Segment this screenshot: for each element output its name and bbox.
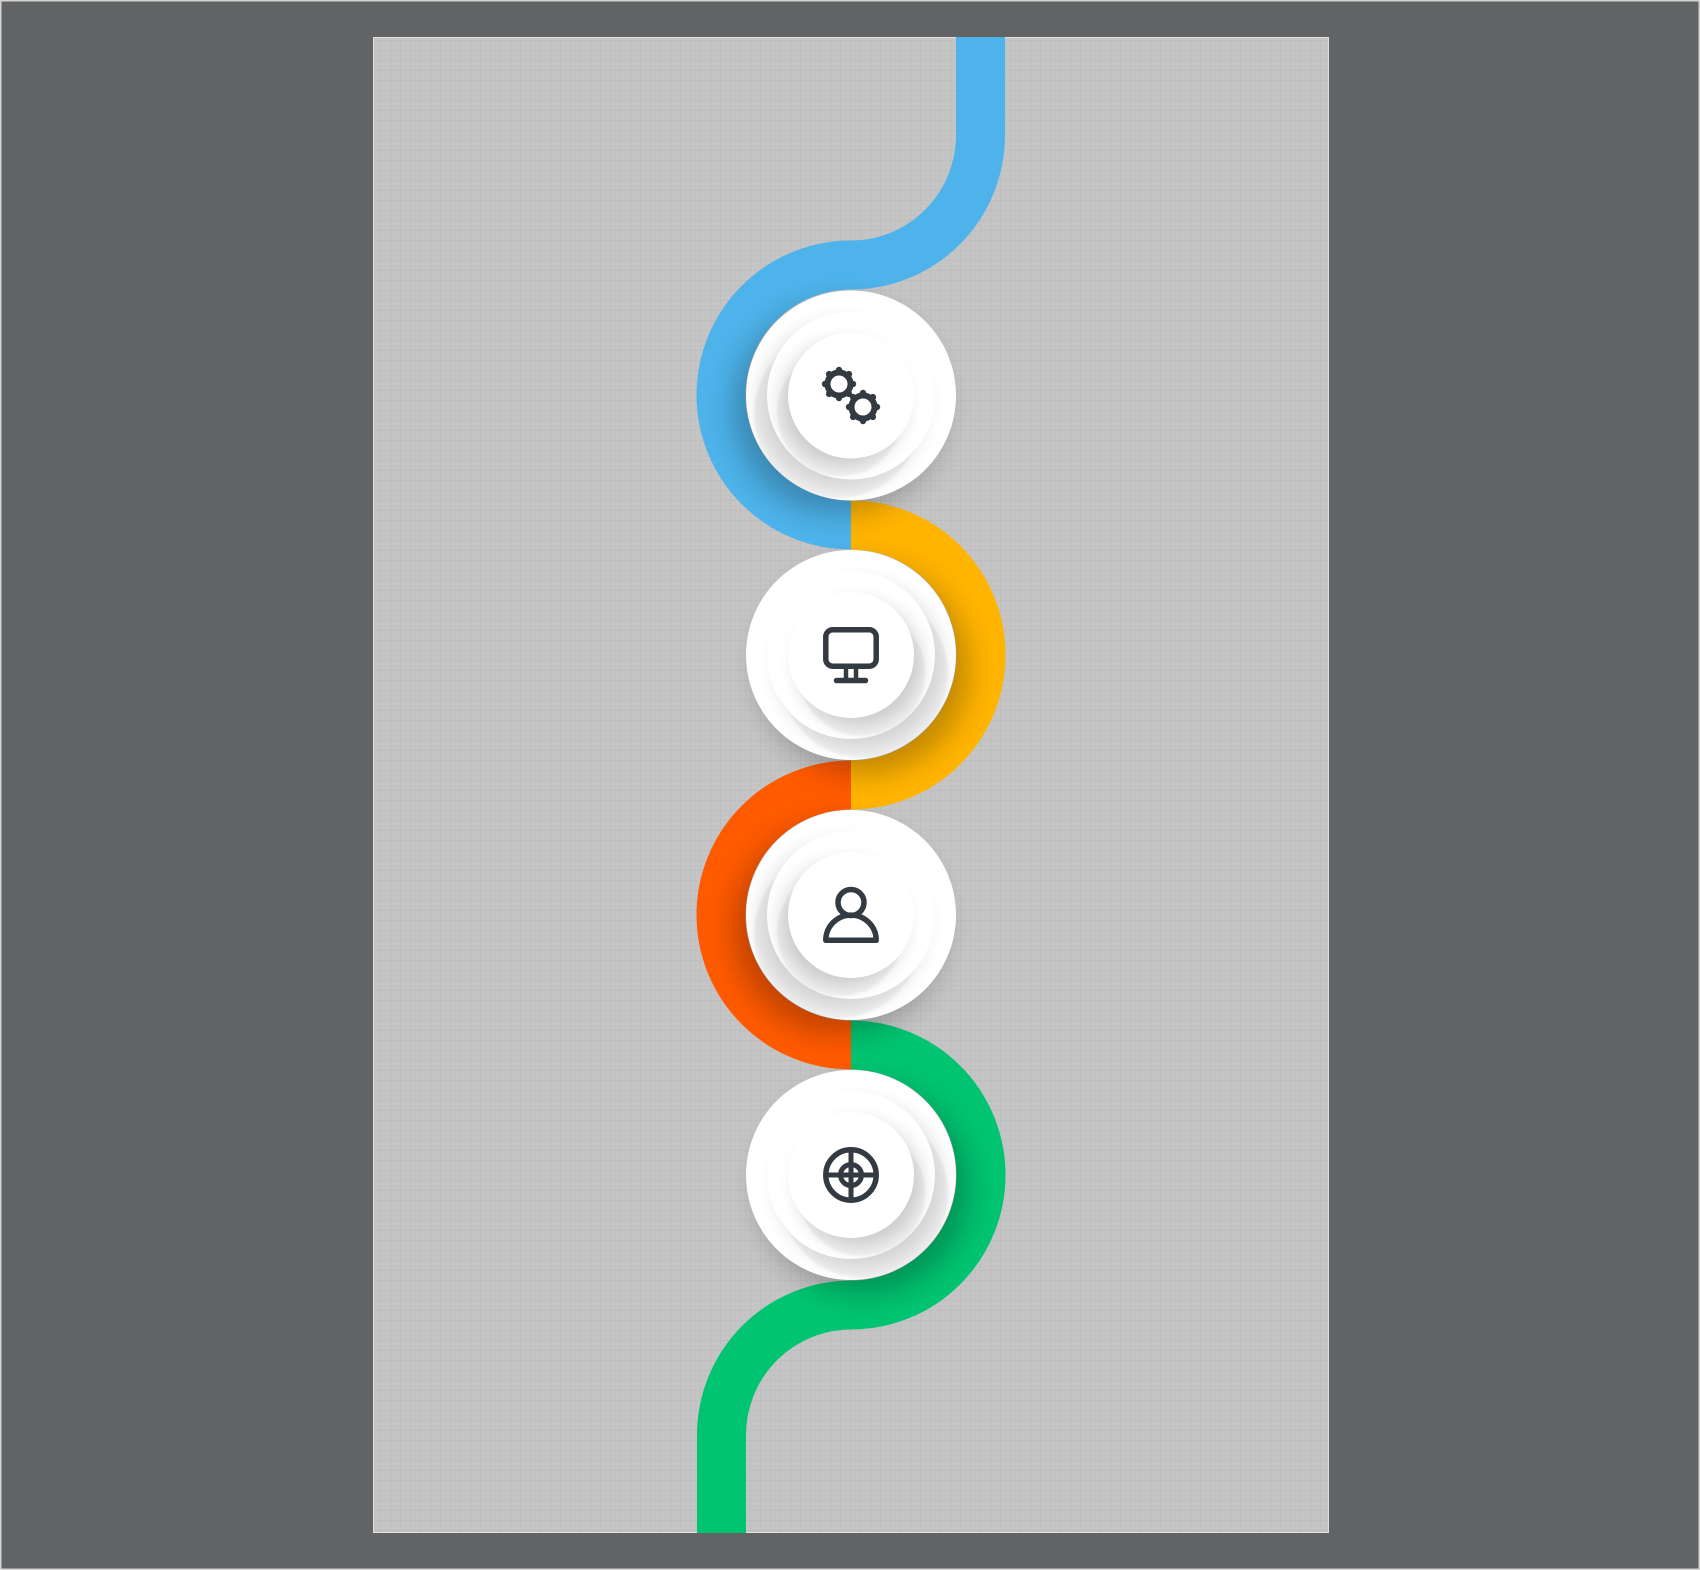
panel: grid background	[374, 38, 1328, 1532]
icon: gears	[822, 367, 880, 424]
step 4: target node	[746, 1070, 969, 1294]
icon: target	[824, 1148, 878, 1202]
step 1: gears node	[733, 290, 956, 514]
icon: monitor	[826, 630, 876, 680]
step 3: person node	[733, 810, 956, 1034]
icon: person	[826, 890, 876, 940]
ribbon: blue segment	[721, 37, 980, 525]
ribbon: orange segment	[721, 785, 851, 1045]
step 2: monitor node	[746, 550, 969, 774]
ribbon: yellow segment	[851, 525, 981, 785]
ribbon: green segment	[722, 1045, 981, 1533]
